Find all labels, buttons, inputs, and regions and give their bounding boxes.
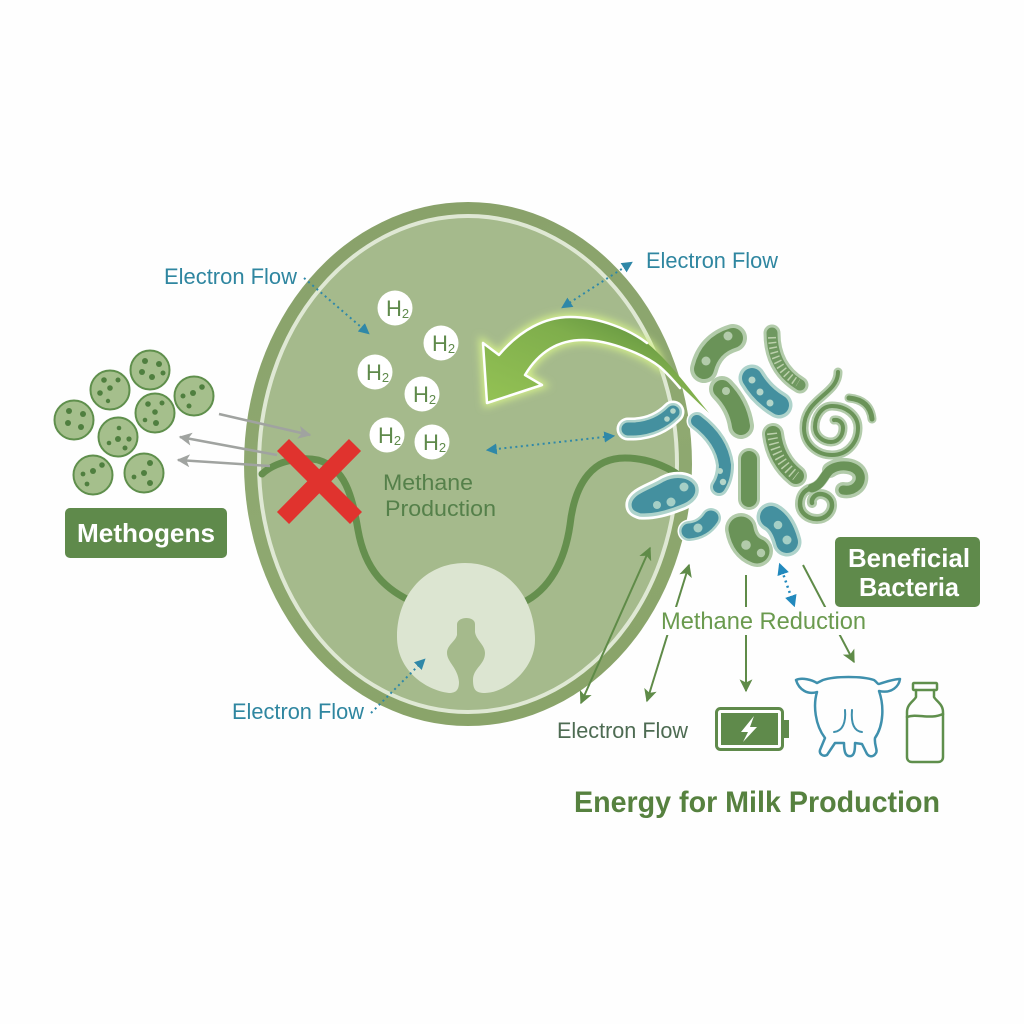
electron flow label: bottom right: Electron Flow — [557, 718, 688, 743]
electron flow label: top right: Electron Flow — [646, 248, 778, 273]
rumen inner pale chamber — [397, 563, 535, 693]
heading: energy for milk production: Energy for Milk Production — [574, 786, 940, 819]
hydrogen molecules: 2 — [394, 433, 401, 448]
beneficial bacteria label: Bacteria — [859, 572, 960, 602]
hydrogen molecules: 2 — [448, 341, 455, 356]
green bacterium — [702, 332, 733, 369]
hydrogen molecules: 2 — [429, 392, 436, 407]
green bean bacterium — [741, 529, 765, 557]
methane production label: Production — [385, 496, 496, 521]
teal small bacterium — [689, 518, 711, 532]
teal bacterium with white border — [628, 408, 676, 429]
icon: battery — [716, 708, 789, 750]
electron flow dotted arrows — [304, 263, 794, 713]
beneficial bacteria cluster — [628, 332, 872, 557]
teal long bacterium — [697, 421, 726, 487]
methogens cell cluster — [54, 350, 214, 494]
methane production label: Methane — [383, 470, 473, 495]
methogens label: Methogens — [77, 518, 215, 548]
beneficial bacteria label — [835, 537, 980, 607]
teal bacterium — [748, 376, 779, 406]
striped bacterium — [772, 333, 800, 385]
spiral bacterium — [804, 372, 858, 455]
hydrogen molecules: 2 — [402, 306, 409, 321]
beneficial bacteria label: Beneficial — [848, 543, 970, 573]
methane reduction label: Methane Reduction — [661, 608, 866, 635]
hydrogen molecules: 2 — [382, 370, 389, 385]
hydrogen molecules: H — [386, 296, 402, 321]
hydrogen molecules: 2 — [439, 440, 446, 455]
internal curved channel — [262, 458, 680, 603]
methogens label — [65, 508, 227, 558]
curly bacterium — [800, 466, 860, 519]
hydrogen molecules: H — [413, 382, 429, 407]
icon: cow udder — [796, 677, 900, 756]
green output arrows — [581, 548, 854, 703]
green bacterium — [722, 387, 741, 426]
red cross — [283, 445, 356, 518]
panel: rumen oval — [244, 202, 692, 726]
methane production label — [383, 470, 496, 521]
hydrogen molecules — [358, 290, 458, 460]
big green curved arrow — [483, 317, 709, 413]
hydrogen molecules: H — [423, 430, 439, 455]
big teal bacterium — [630, 476, 697, 515]
teal bean bacterium — [771, 517, 792, 544]
hydrogen molecules: H — [378, 423, 394, 448]
hydrogen molecules: H — [432, 331, 448, 356]
electron flow label: top left: Electron Flow — [164, 264, 297, 289]
gray exchange arrows — [178, 414, 310, 466]
icon: milk bottle — [907, 683, 943, 762]
striped bacterium — [772, 433, 796, 476]
hydrogen molecules: H — [366, 360, 382, 385]
small curved bacterium — [849, 398, 872, 419]
green vertical bacterium — [738, 459, 760, 499]
electron flow label: bottom centre: Electron Flow — [232, 699, 364, 724]
